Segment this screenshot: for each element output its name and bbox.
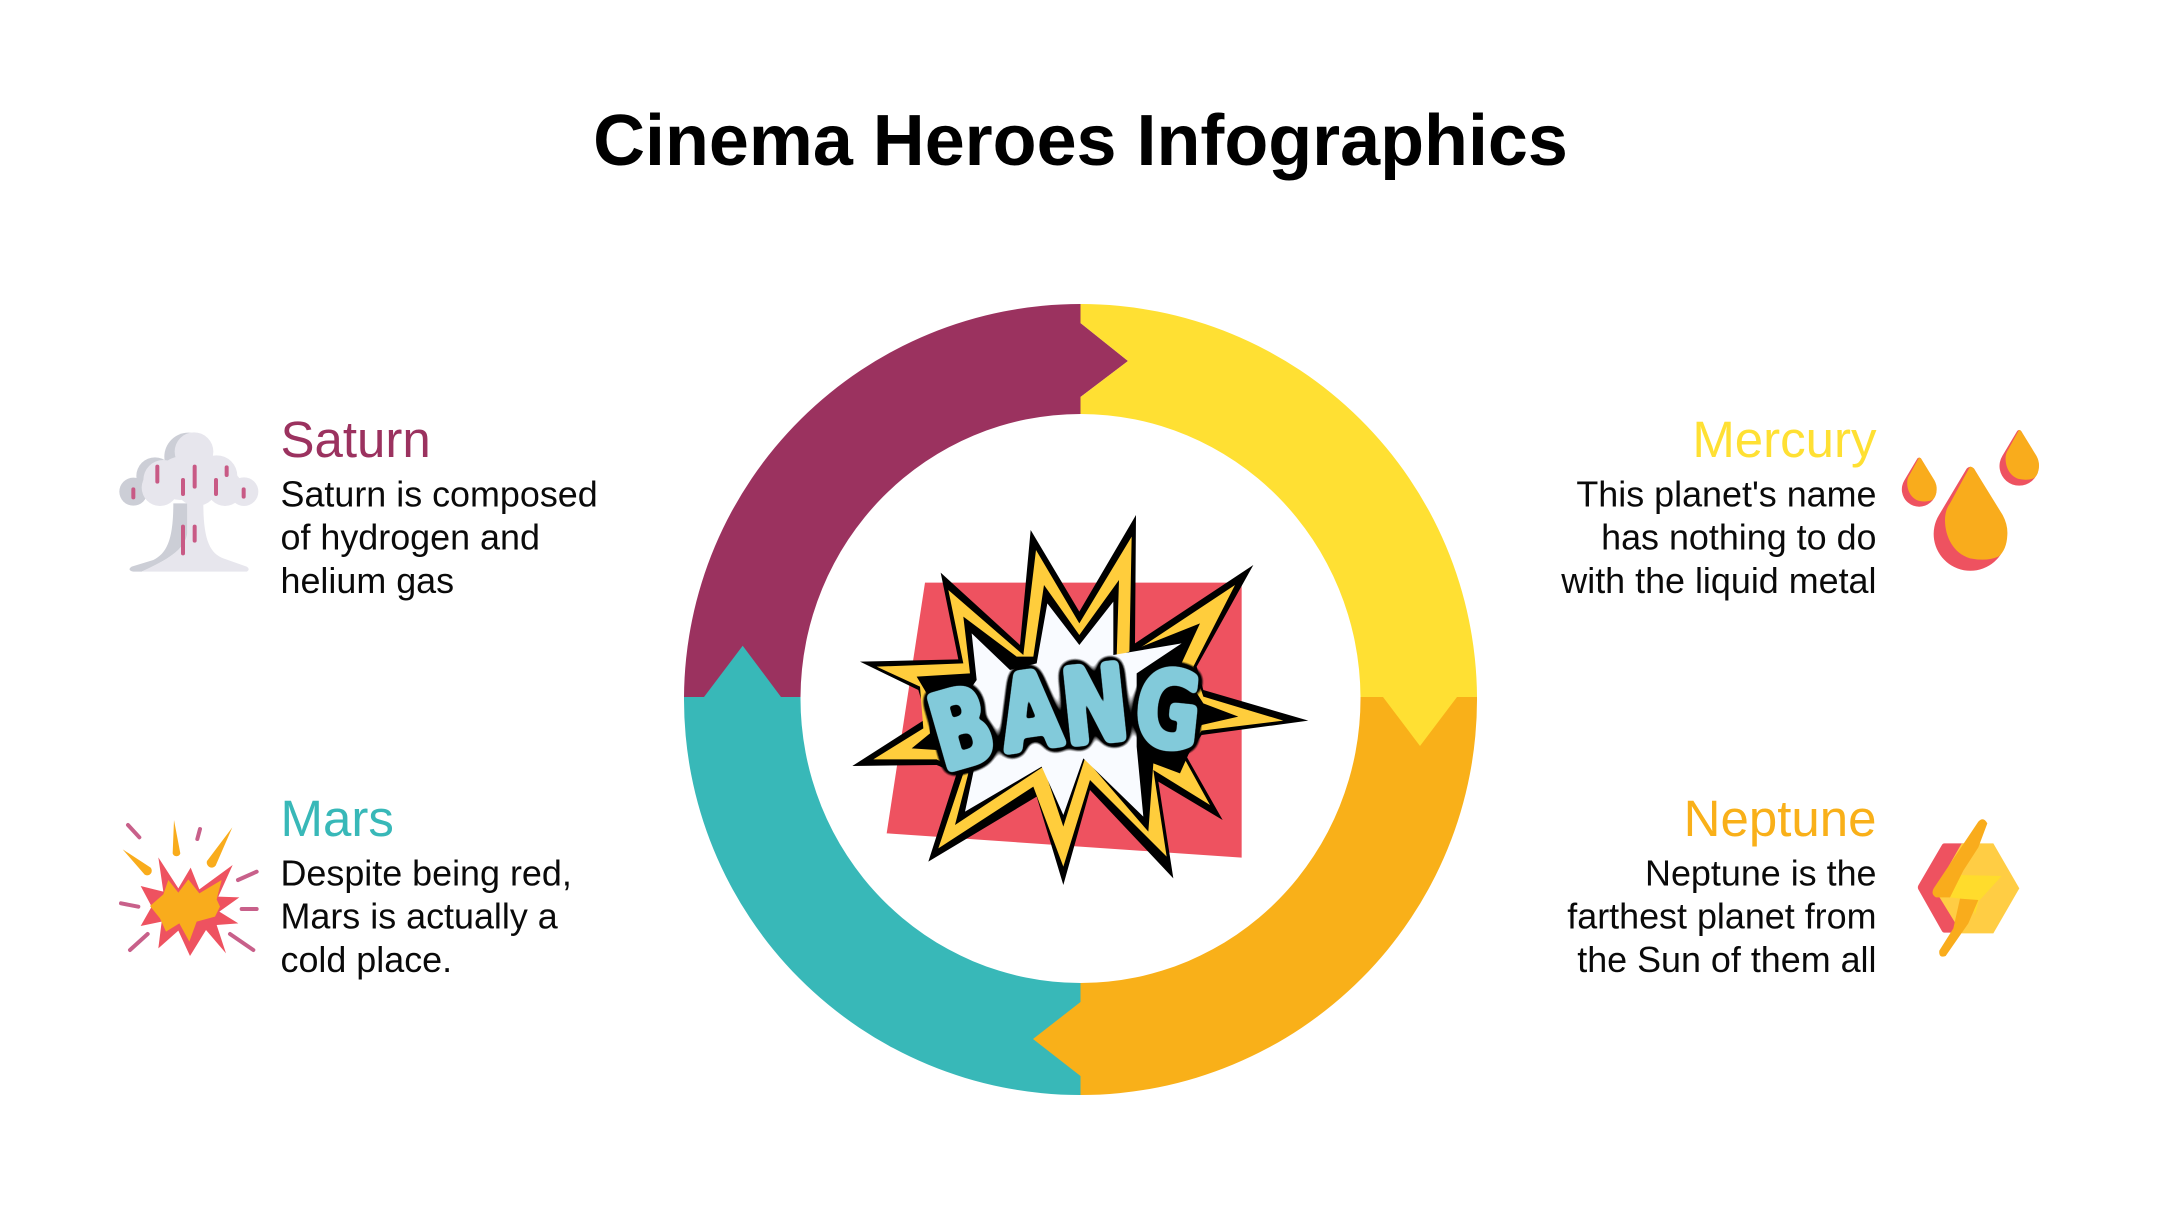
text block: Mercury: [1560, 411, 1877, 601]
description: Mars: cold place.: [280, 940, 452, 980]
bright bolt center: [1950, 875, 2002, 915]
description: Mercury: This planet's name: [1576, 474, 1876, 514]
description: Mercury: with the liquid metal: [1560, 561, 1876, 601]
description: Saturn: of hydrogen and: [280, 518, 540, 558]
yellow hexagon: [1935, 843, 2019, 933]
description: Saturn: helium gas: [280, 561, 454, 601]
arrow segment: Mercury yellow: [1080, 304, 1477, 746]
description: Neptune: farthest planet from: [1567, 896, 1876, 936]
BANG lettering: [916, 641, 1207, 798]
BANG lettering: N: [1056, 641, 1134, 772]
BANG lettering: B: [916, 662, 1008, 798]
description: Mercury: has nothing to do: [1601, 518, 1876, 558]
heading: Saturn: Saturn: [280, 411, 431, 468]
icon: Mars explosion: [121, 820, 257, 956]
cloud light: [142, 432, 258, 572]
text block: Neptune: [1567, 790, 1876, 980]
explosion red star: [141, 857, 239, 956]
red backdrop: [887, 583, 1242, 858]
icon: Saturn mushroom cloud: [119, 432, 258, 572]
title: Cinema Heroes Infographics: [593, 101, 1568, 181]
explosion orange core: [150, 879, 222, 942]
red hexagon: [1918, 843, 1970, 933]
heading: Mercury: Mercury: [1692, 411, 1877, 468]
heading: Neptune: Neptune: [1684, 790, 1876, 847]
left drop: [1902, 457, 1937, 507]
icon: Neptune lightning hexagon: [1918, 819, 2019, 957]
arrow segment: Mars teal: [684, 646, 1080, 1095]
description: Saturn: Saturn is composed: [280, 474, 598, 514]
description: Mars: Despite being red,: [280, 854, 572, 894]
BANG lettering: G: [1129, 647, 1207, 777]
pink rays: [121, 825, 257, 950]
description: Neptune: the Sun of them all: [1577, 940, 1876, 980]
orange sparks: [123, 820, 232, 875]
heading: Mars: Mars: [280, 790, 394, 847]
arrow segment: Neptune orange: [1033, 697, 1477, 1095]
description: Neptune: Neptune is the: [1645, 854, 1876, 894]
BANG lettering: A: [991, 648, 1069, 779]
arrow segment: Saturn purple: [684, 304, 1128, 697]
center illustration: BANG comic burst: [852, 515, 1308, 885]
burst outer outline: [852, 515, 1308, 885]
icon: Mercury drops: [1902, 430, 2039, 571]
large drop: [1934, 467, 2007, 571]
text block: Saturn: [280, 411, 598, 601]
burst white core: [953, 602, 1182, 817]
cloud shadow: [119, 433, 212, 572]
description: Mars: Mars is actually a: [280, 896, 558, 936]
circular arrow ring: [684, 304, 1477, 1095]
pink streaks: [133, 467, 244, 553]
text block: Mars: [280, 790, 572, 980]
orange bolt: [1933, 819, 1987, 957]
right drop: [2000, 430, 2039, 486]
burst inner outline: [912, 580, 1238, 832]
burst yellow band: [873, 537, 1283, 867]
